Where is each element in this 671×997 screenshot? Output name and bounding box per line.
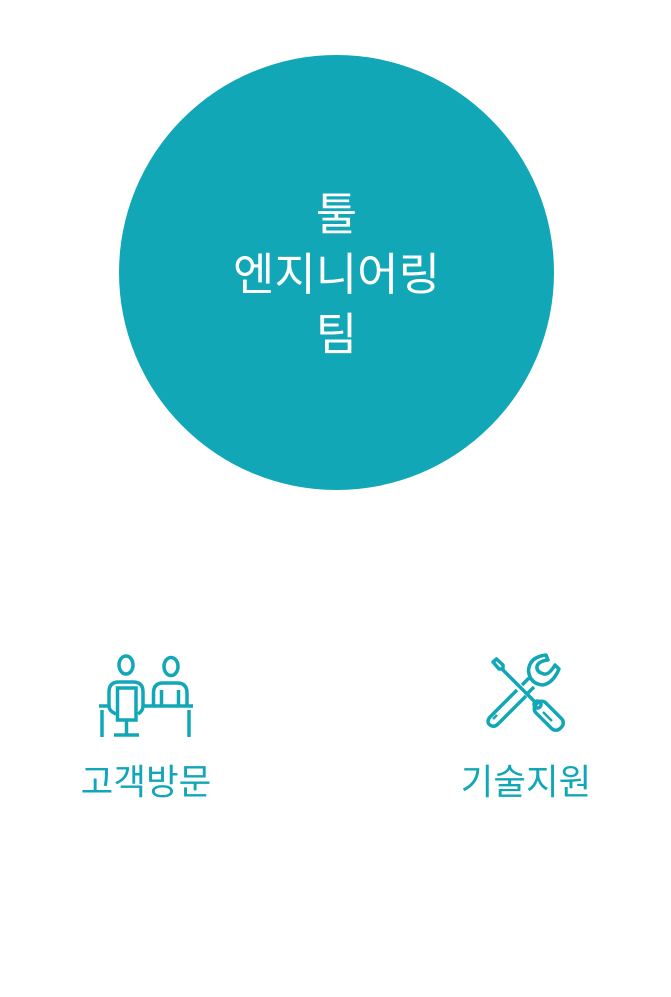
label: customer visit: 고객방문	[81, 762, 211, 802]
circle title line 3: 팀	[316, 309, 357, 360]
panel: team circle	[119, 55, 554, 490]
label: technical support: 기술지원	[461, 762, 591, 802]
circle title line 2: 엔지니어링	[233, 249, 440, 300]
circle title line 1: 툴	[316, 189, 357, 240]
